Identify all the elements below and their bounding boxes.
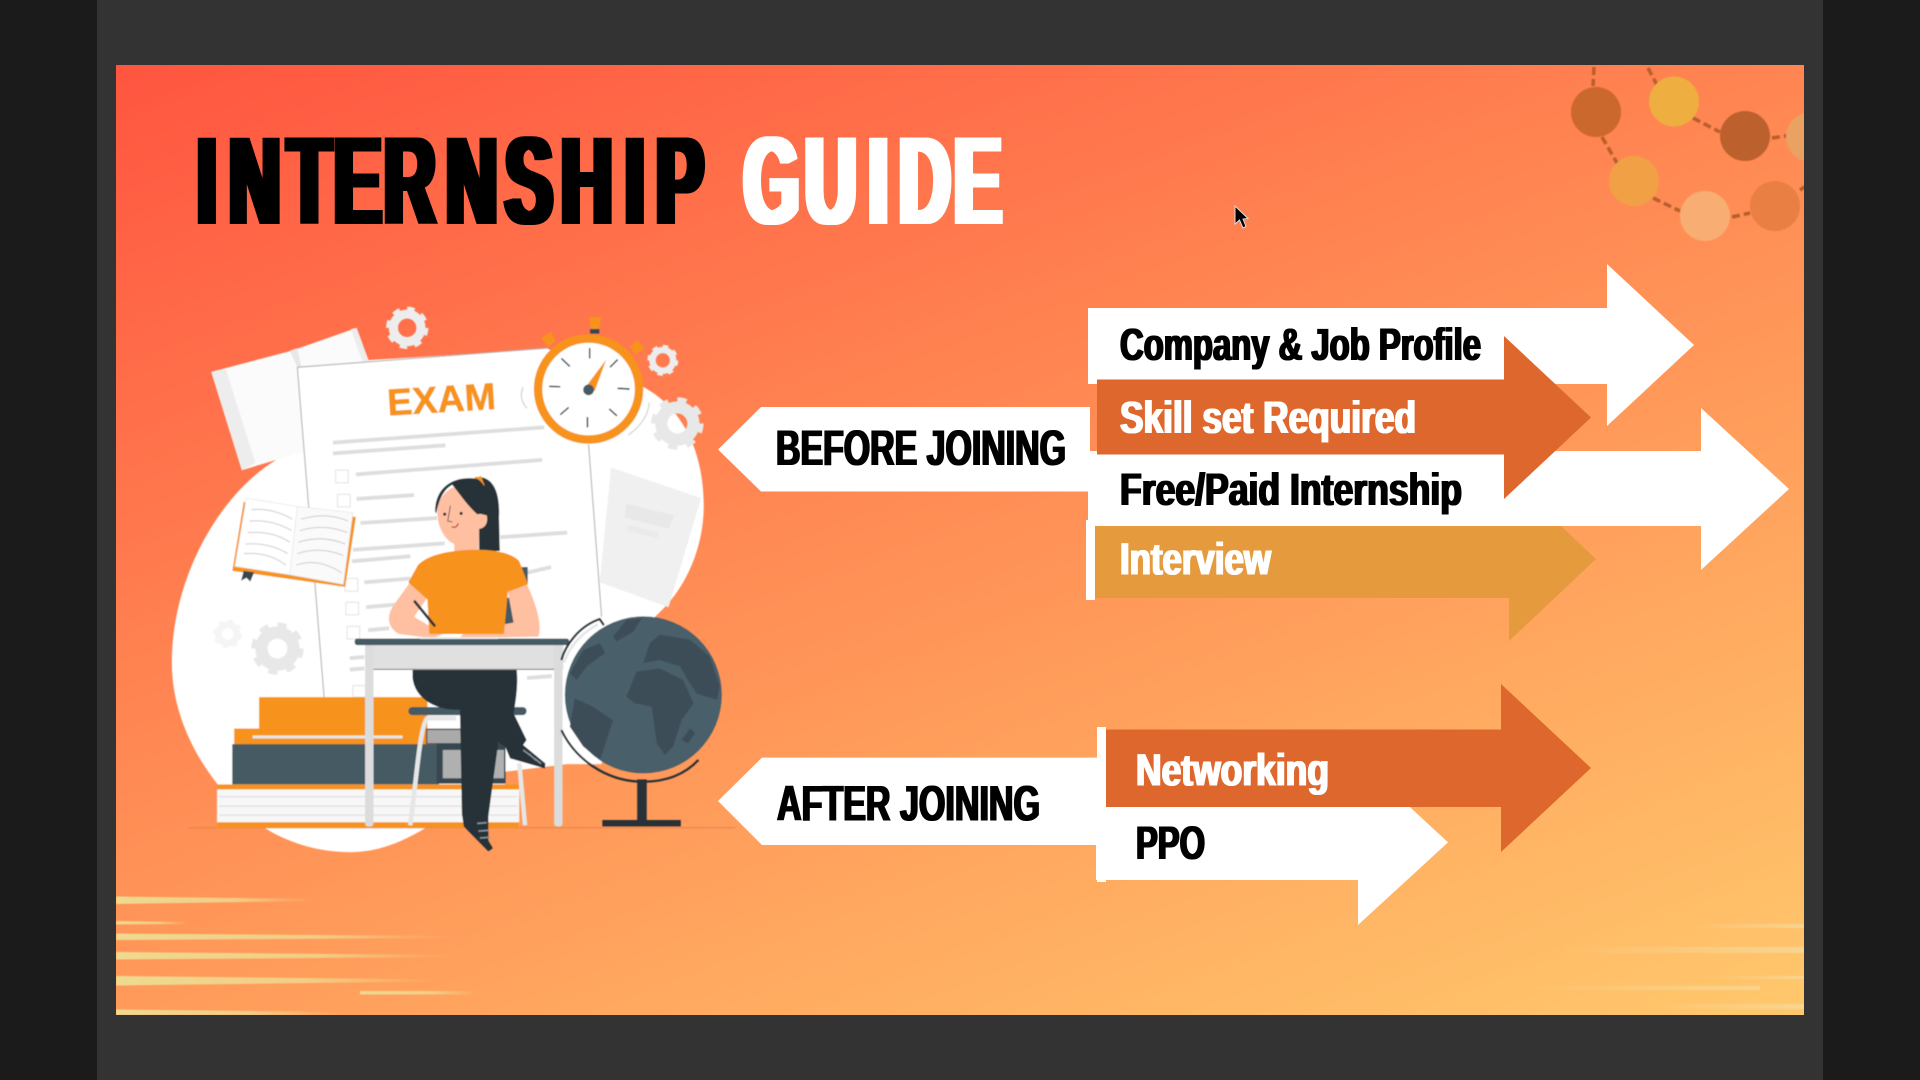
illustration: student at exam desk — [172, 309, 736, 852]
network of circles top right — [1570, 66, 1804, 242]
gears — [215, 309, 701, 672]
globe — [561, 616, 722, 826]
floor line — [188, 826, 736, 829]
arrow: free/paid internship — [1088, 408, 1789, 570]
grey book — [600, 468, 701, 607]
stopwatch — [521, 317, 649, 444]
label: after joining: AFTER JOINING — [777, 776, 1040, 832]
title: INTERNSHIP — [197, 111, 704, 251]
arrow: after joining — [718, 758, 1097, 845]
arrow: ppo — [1096, 759, 1448, 925]
arrow: before joining — [718, 407, 1090, 492]
arrow: networking — [1106, 684, 1591, 852]
desk — [355, 637, 569, 826]
open book behind paper — [211, 328, 369, 470]
exam paper — [297, 348, 602, 697]
label: interview: Interview — [1120, 534, 1272, 584]
arrow: company and job profile — [1088, 264, 1694, 426]
slide panel — [116, 65, 1836, 1015]
student figure — [389, 476, 545, 851]
label: skill set required: Skill set Required — [1120, 392, 1416, 443]
arrow: interview — [1095, 477, 1596, 641]
decorative stripes bottom left — [116, 896, 478, 1015]
exam label: EXAM — [386, 375, 497, 423]
label: networking: Networking — [1136, 744, 1329, 796]
book stack — [217, 697, 519, 828]
chair — [408, 567, 528, 825]
white connector strip: after — [1097, 727, 1106, 882]
label: before joining: BEFORE JOINING — [776, 420, 1066, 476]
white blob — [172, 349, 704, 852]
mouse cursor — [1235, 206, 1248, 228]
title — [197, 111, 1002, 251]
label: free/paid internship: Free/Paid Internship — [1120, 464, 1462, 515]
label: ppo: PPO — [1136, 816, 1205, 869]
label: company and job profile: Company & Job Profile — [1120, 319, 1481, 370]
arrow: skill set required — [1097, 336, 1591, 499]
small open book — [232, 498, 356, 587]
decorative stripes bottom right — [1576, 924, 1804, 1010]
white connector strip: before — [1086, 520, 1095, 600]
title: GUIDE — [744, 111, 1002, 251]
